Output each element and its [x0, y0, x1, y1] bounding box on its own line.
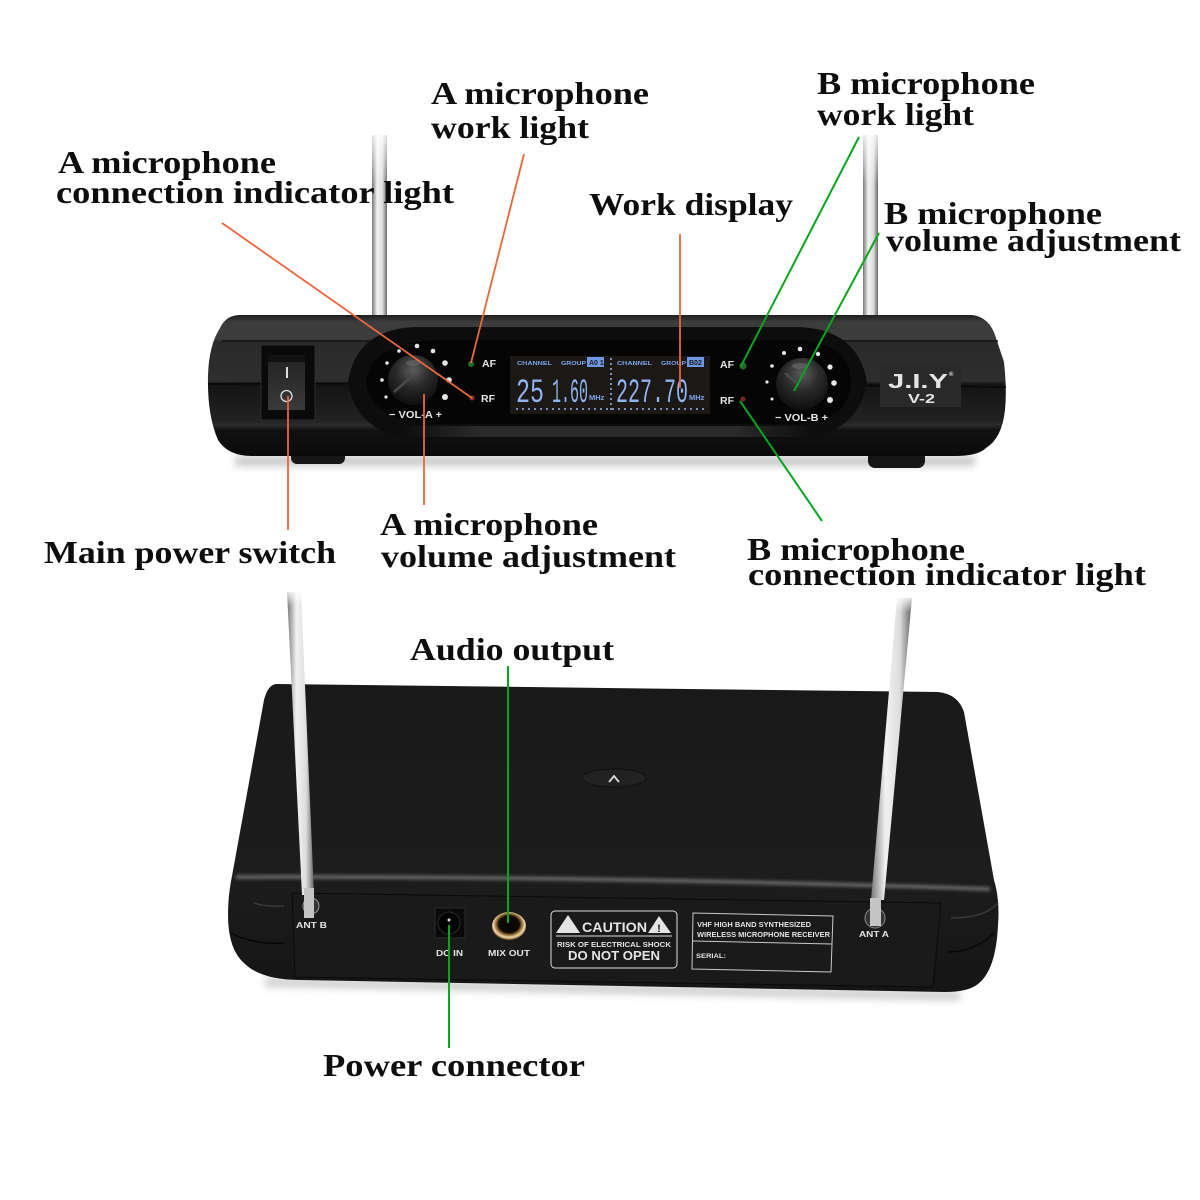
label: B microphone volume adjustment: volume adjustment — [886, 222, 1181, 258]
brand badge: J.I.Y — [888, 371, 949, 393]
work display LCD: MHz — [589, 393, 605, 402]
label: B microphone work light: B microphone — [817, 65, 1035, 101]
work display LCD: 227.70 — [616, 375, 688, 413]
ANT A antenna: ANT A — [859, 930, 889, 939]
MIX OUT audio jack: MIX OUT — [488, 949, 530, 958]
caution label: CAUTION — [582, 919, 647, 935]
work display LCD: GROUP — [561, 361, 586, 367]
receiver body — [208, 315, 1006, 456]
feet — [291, 448, 345, 464]
label: A microphone work light: work light — [431, 109, 589, 145]
label: A microphone connection indicator light: connection indicator light — [56, 174, 454, 210]
receiver info label: WIRELESS MICROPHONE RECEIVER — [697, 932, 830, 939]
ANT B antenna — [285, 592, 327, 930]
label: main power switch: Main power switch — [44, 534, 336, 570]
label: B microphone connection indicator light: B microphone — [747, 531, 965, 567]
top antennas — [370, 135, 880, 320]
DC IN power jack — [435, 908, 465, 958]
rear view of receiver — [228, 592, 998, 996]
front view of receiver — [208, 315, 1006, 468]
label: A microphone work light: A microphone — [431, 75, 649, 111]
brand badge: ® — [949, 371, 954, 378]
label: A microphone volume adjustment: A microphone — [380, 506, 598, 542]
label: B microphone work light: work light — [817, 96, 974, 132]
brand badge: V-2 — [908, 391, 935, 406]
work display LCD: CHANNEL — [517, 361, 553, 367]
work display LCD: 1.60 — [552, 375, 588, 413]
receiver info label — [692, 913, 833, 972]
MIX OUT audio jack — [488, 912, 530, 958]
shadow under front unit — [235, 456, 975, 466]
label: A microphone volume adjustment: volume adjustment — [381, 538, 676, 574]
volume A knob with dots — [380, 344, 452, 421]
label: B microphone connection indicator light: connection indicator light — [748, 556, 1146, 592]
A indicators: AF — [482, 358, 497, 370]
receiver info label: SERIAL: — [696, 953, 726, 960]
caution label: RISK OF ELECTRICAL SHOCK — [557, 940, 672, 949]
B indicators — [720, 359, 746, 407]
caution label: DO NOT OPEN — [568, 948, 660, 963]
B indicators: RF — [720, 395, 735, 407]
control panel — [348, 327, 867, 438]
orange callout lines — [222, 154, 680, 530]
ANT A antenna — [859, 598, 914, 939]
ANT B antenna: ANT B — [296, 921, 327, 930]
rear panel — [292, 893, 941, 987]
green callout lines — [449, 137, 879, 1048]
work display LCD — [510, 356, 710, 414]
label: work display: Work display — [589, 186, 793, 222]
label: power connector: Power connector — [323, 1047, 585, 1083]
volume A knob with dots: − VOL-A + — [389, 409, 442, 421]
caution label — [551, 911, 677, 968]
A indicators — [468, 358, 497, 405]
work display LCD: A0 1 — [589, 360, 604, 367]
volume B knob with dots: − VOL-B + — [775, 412, 828, 424]
power switch — [261, 345, 315, 420]
caution label: ! — [657, 923, 661, 935]
label: B microphone volume adjustment: B microphone — [884, 195, 1102, 231]
label: A microphone connection indicator light: A microphone — [58, 144, 276, 180]
work display LCD: 25 — [516, 375, 544, 413]
work display LCD: CHANNEL — [617, 361, 653, 367]
work display LCD: B02 — [689, 360, 702, 367]
A indicators: RF — [481, 393, 496, 405]
work display LCD: MHz — [689, 393, 705, 402]
DC IN power jack: DC IN — [436, 949, 463, 958]
work display LCD: GROUP — [661, 361, 686, 367]
brand badge — [880, 364, 961, 407]
shadow under rear unit — [265, 982, 960, 996]
volume B knob with dots — [765, 347, 837, 424]
top logo mark — [582, 769, 646, 787]
rear top face — [228, 684, 998, 992]
B indicators: AF — [720, 359, 735, 371]
label: audio output: Audio output — [410, 631, 614, 667]
receiver info label: VHF HIGH BAND SYNTHESIZED — [697, 922, 811, 929]
